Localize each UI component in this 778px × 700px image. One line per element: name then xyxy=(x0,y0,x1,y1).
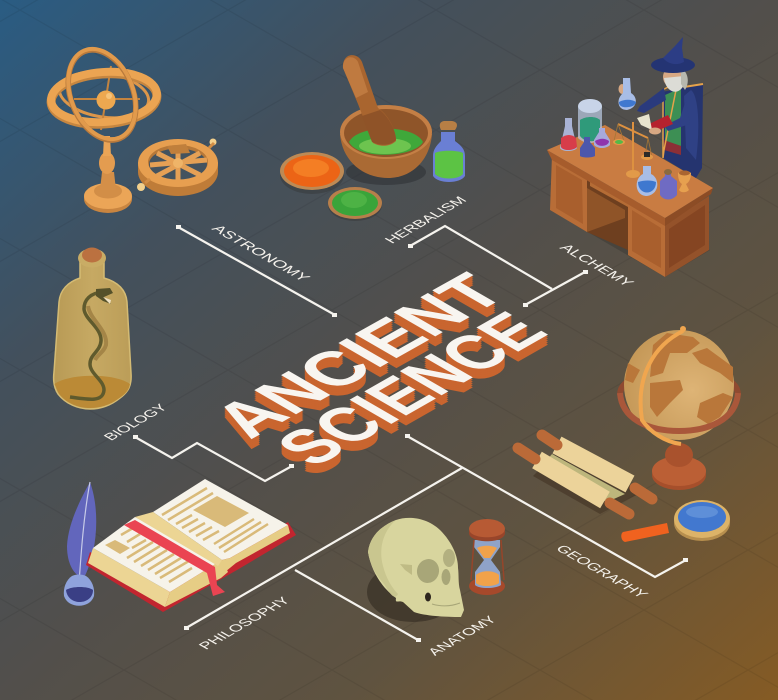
icon: open book xyxy=(86,479,296,612)
label: herbalism: HERBALISM xyxy=(381,194,470,246)
title: ancient science: ANCIENT xyxy=(196,267,522,451)
title: ancient science: SCIENCE xyxy=(259,308,563,482)
title: ancient science: SCIENCE xyxy=(259,306,563,480)
icon: snake in bottle xyxy=(54,248,131,409)
label: anatomy: ANATOMY xyxy=(424,613,501,658)
icon: alchemy flasks and scales xyxy=(560,99,691,200)
icon: wizard xyxy=(618,37,703,178)
icon: green powder dish xyxy=(328,187,382,221)
icon: magnifying glass xyxy=(621,500,730,542)
connector: astronomy xyxy=(176,225,337,317)
label: geography: GEOGRAPHY xyxy=(552,542,653,600)
title: ancient science: ANCIENT xyxy=(196,273,522,457)
icon: alchemy desk xyxy=(547,125,713,277)
connector: biology xyxy=(133,435,294,481)
icon: globe xyxy=(620,326,738,490)
title: ancient science: SCIENCE xyxy=(259,304,563,478)
title: ancient science: ANCIENT xyxy=(196,271,522,455)
title: ancient science: SCIENCE xyxy=(259,310,563,484)
label: astronomy: ASTRONOMY xyxy=(208,222,315,284)
connector: herbalism and alchemy xyxy=(408,226,588,307)
icon: mortar and pestle xyxy=(340,55,432,185)
title: ancient science: ANCIENT xyxy=(196,269,522,453)
icon: hourglass xyxy=(469,519,505,595)
icon: green potion bottle xyxy=(433,121,465,182)
label: alchemy: ALCHEMY xyxy=(556,241,638,289)
connector: philosophy and anatomy xyxy=(184,468,462,642)
icon: quill and inkwell xyxy=(64,482,96,606)
icon: orange powder dish xyxy=(280,152,344,194)
title: ancient science: SCIENCE xyxy=(259,302,563,476)
title: ancient science: SCIENCE xyxy=(259,312,563,486)
icon: skull xyxy=(367,518,464,622)
connector: geography xyxy=(405,434,688,577)
label: biology: BIOLOGY xyxy=(100,401,171,443)
label: philosophy: PHILOSOPHY xyxy=(195,594,294,652)
icon: scrolls xyxy=(518,435,652,514)
title: ancient science: ANCIENT xyxy=(196,263,522,447)
icon: astrolabe xyxy=(137,138,218,196)
title: ancient science: ANCIENT xyxy=(196,265,522,449)
icon: armillary sphere xyxy=(49,39,159,213)
